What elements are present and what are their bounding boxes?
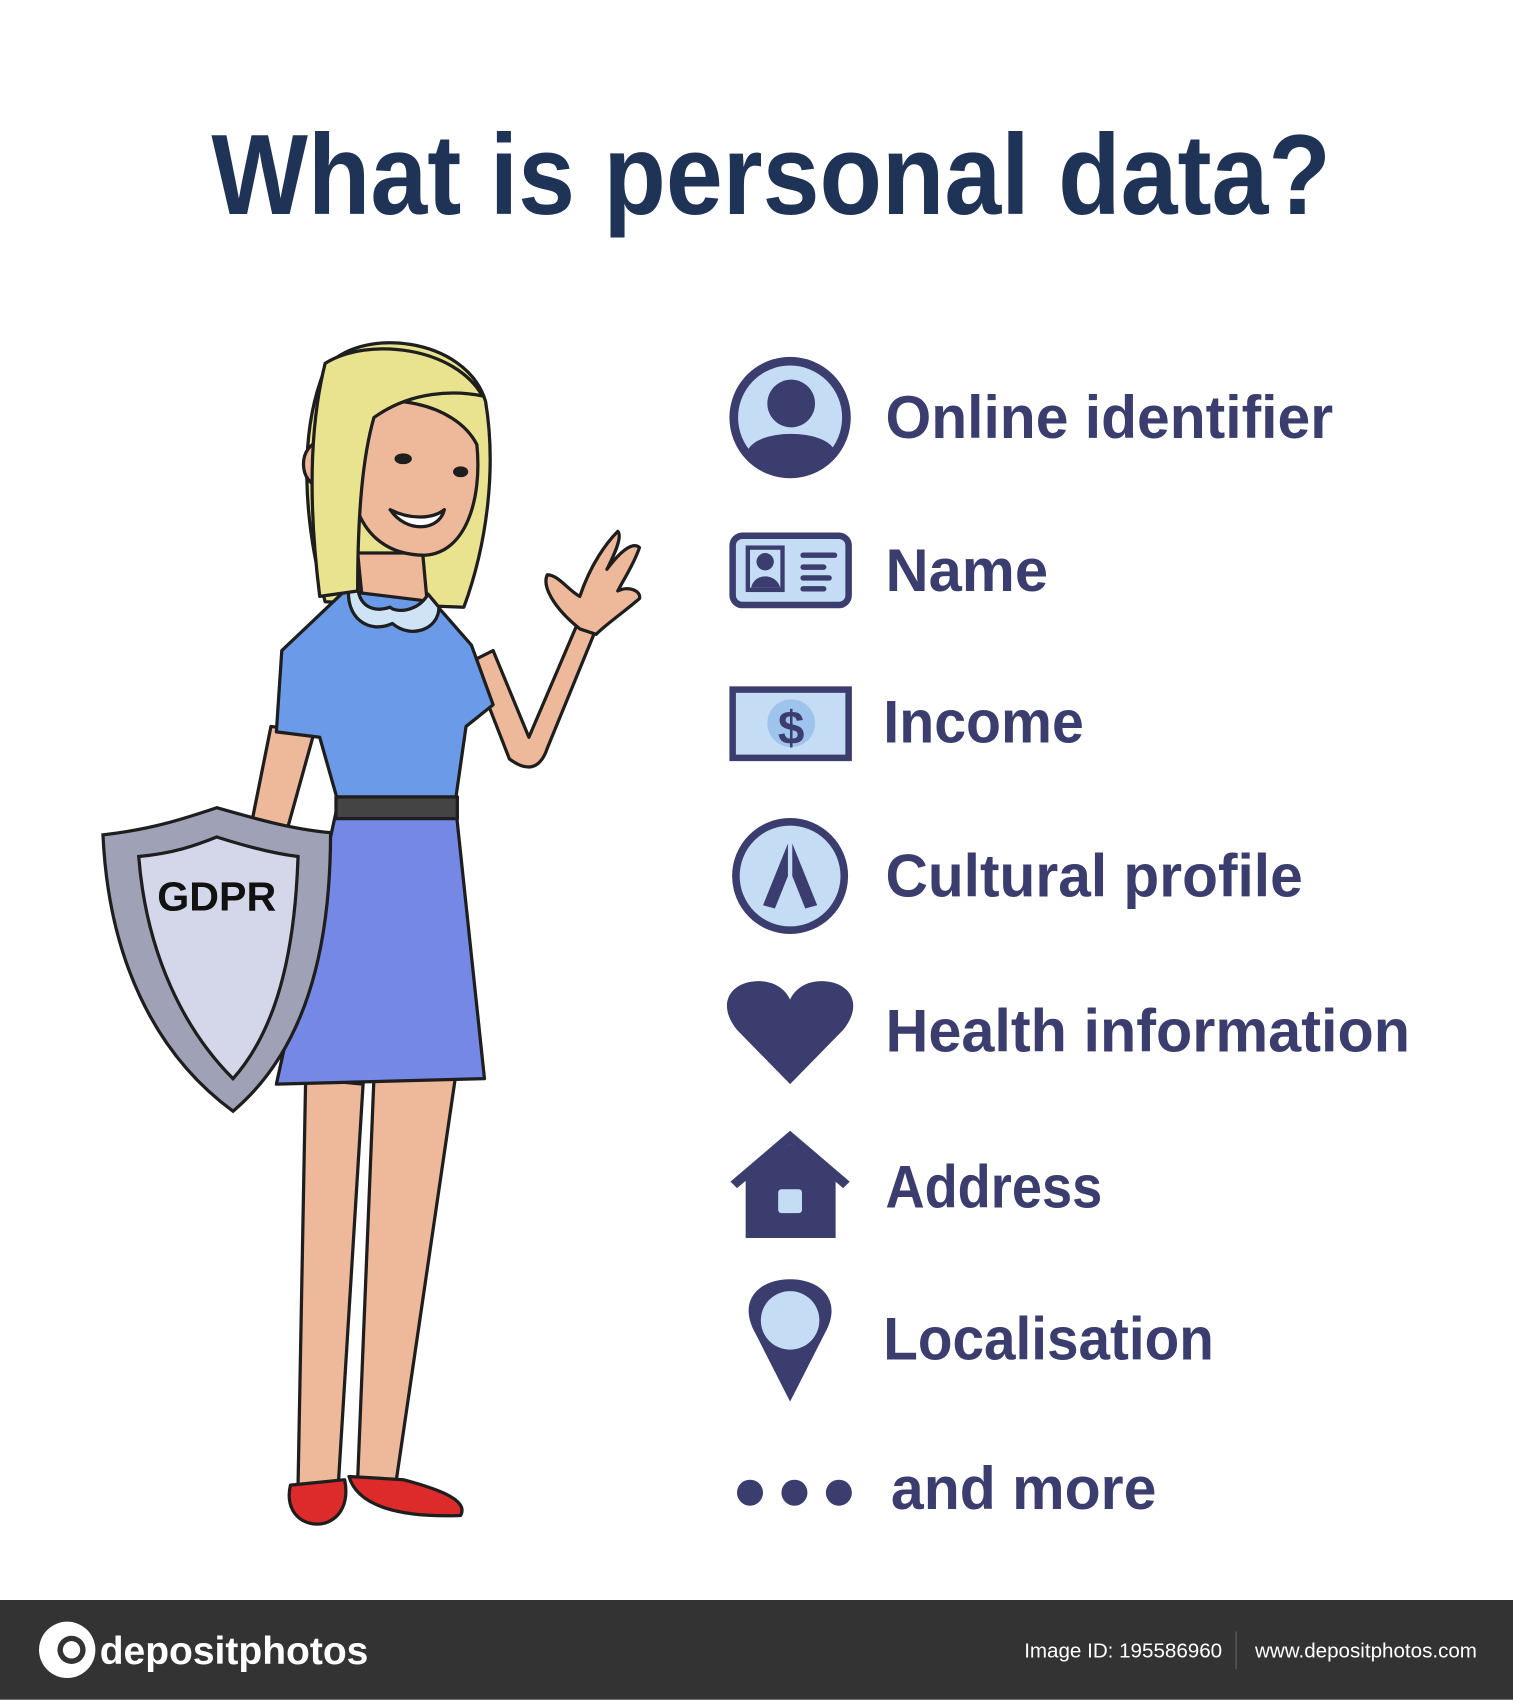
footer bar: www.depositphotos.com bbox=[1254, 1639, 1477, 1662]
title: What is personal data? bbox=[211, 112, 1331, 239]
footer bar: depositphotos bbox=[100, 1630, 368, 1673]
face bbox=[352, 401, 478, 555]
raised arm bbox=[471, 618, 596, 767]
item: income: Income bbox=[883, 688, 1084, 756]
item: cultural profile: Cultural profile bbox=[885, 842, 1303, 910]
mouth bbox=[390, 510, 444, 527]
ear bbox=[303, 442, 336, 486]
collar bbox=[348, 583, 439, 631]
hair back bbox=[307, 343, 490, 607]
item: localisation bbox=[749, 1279, 1214, 1402]
item: and more: and more bbox=[891, 1454, 1156, 1522]
neck bbox=[358, 553, 428, 613]
item: income bbox=[733, 688, 1084, 758]
item: online identifier bbox=[734, 361, 1333, 475]
hand bbox=[546, 531, 640, 634]
item: health information bbox=[727, 981, 1410, 1084]
item: name bbox=[733, 536, 1048, 605]
shoes bbox=[289, 1480, 346, 1524]
shield GDPR bbox=[103, 808, 331, 1111]
woman illustration bbox=[251, 343, 640, 1524]
legs bbox=[298, 1079, 363, 1487]
item: and more bbox=[737, 1454, 1156, 1522]
item: online identifier: Online identifier bbox=[885, 383, 1333, 451]
footer bar: Image ID: 195586960 bbox=[1024, 1639, 1222, 1662]
shield GDPR: GDPR bbox=[157, 874, 276, 920]
belt bbox=[336, 797, 457, 819]
item: income: $ bbox=[778, 702, 804, 755]
item: cultural profile bbox=[736, 822, 1303, 930]
dress bbox=[276, 591, 493, 802]
lower arm left bbox=[251, 726, 314, 829]
footer bar bbox=[0, 1600, 1513, 1700]
item: localisation: Localisation bbox=[883, 1304, 1214, 1372]
hair front bbox=[312, 349, 482, 596]
item: address bbox=[730, 1131, 1102, 1238]
item: health information: Health information bbox=[885, 997, 1410, 1065]
item: name: Name bbox=[885, 536, 1048, 604]
item: address: Address bbox=[885, 1153, 1102, 1221]
